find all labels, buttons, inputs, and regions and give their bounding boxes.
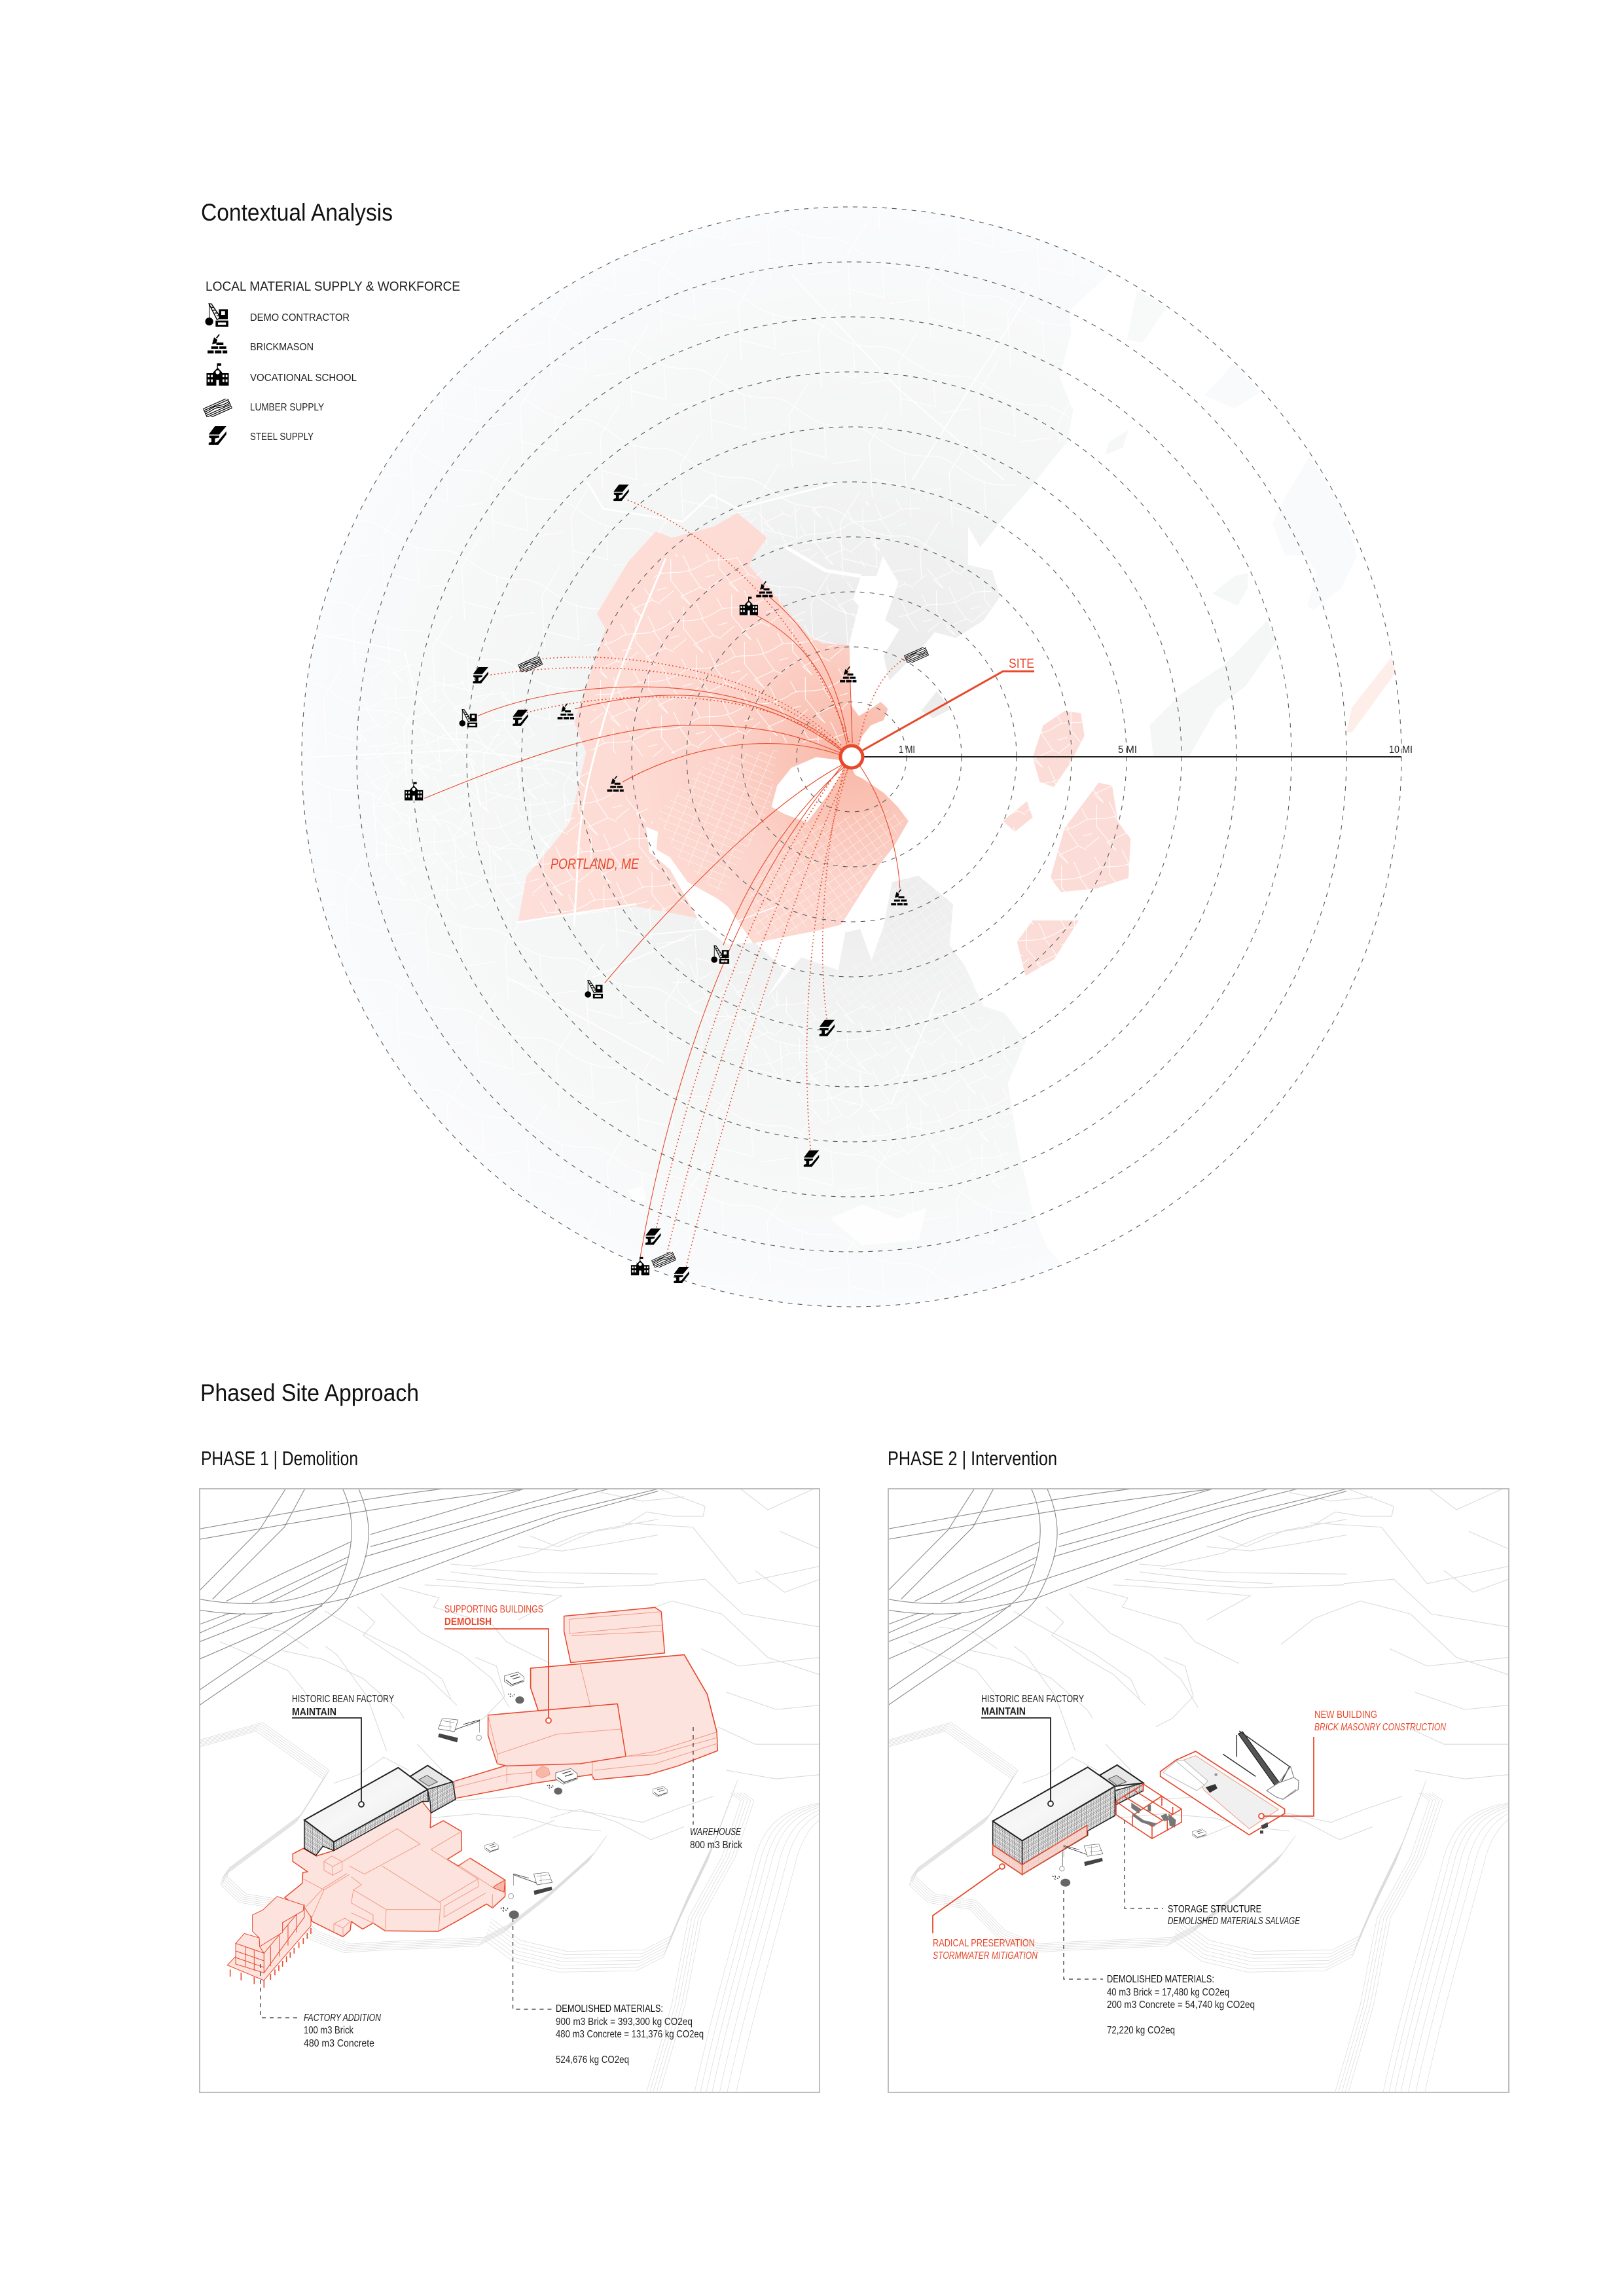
panel: phase 1 demolition	[194, 1489, 861, 2092]
callout: demolished materials phase 2: 72,220 kg CO2eq	[1107, 2025, 1175, 2036]
pink city of Portland area	[295, 274, 1396, 1105]
callout: new building	[1259, 1709, 1447, 1819]
callout: demolished materials phase 1	[513, 1918, 704, 2066]
legend: local material supply and workforce: LOCAL MATERIAL SUPPLY & WORKFORCE	[206, 280, 460, 294]
callout: demolished materials phase 2: 40 m3 Brick = 17,480 kg CO2eq	[1107, 1987, 1229, 1998]
callout: radical preservation: RADICAL PRESERVATION	[933, 1938, 1035, 1949]
legend: local material supply and workforce: LUMBER SUPPLY	[250, 402, 324, 413]
callout: storage structure: DEMOLISHED MATERIALS SALVAGE	[1168, 1916, 1300, 1927]
callout: factory addition: 100 m3 Brick	[304, 2025, 353, 2036]
callout: demolished materials phase 2: DEMOLISHED MATERIALS:	[1107, 1974, 1214, 1985]
distance labels: 1 MI	[899, 744, 915, 756]
distance labels: 10 MI	[1389, 744, 1413, 756]
callout: warehouse: WAREHOUSE	[690, 1827, 742, 1838]
callout: radical preservation	[933, 1864, 1038, 1961]
building: new brick masonry building	[1161, 1751, 1285, 1835]
site marker and leader	[840, 657, 1034, 768]
callout: historic bean factory maintain	[292, 1694, 394, 1807]
callout: storage structure	[1125, 1820, 1300, 1927]
callout: demolished materials phase 2	[1064, 1890, 1255, 2036]
callout: storage structure: STORAGE STRUCTURE	[1168, 1904, 1261, 1915]
callout: factory addition: 480 m3 Concrete	[304, 2038, 374, 2049]
callout: factory addition: FACTORY ADDITION	[304, 2013, 382, 2024]
distance axis	[863, 756, 1401, 757]
distance rings	[302, 207, 1401, 1307]
callout: demolished materials phase 1: 480 m3 Concrete = 131,376 kg CO2eq	[556, 2029, 704, 2040]
water: river inlet	[785, 547, 861, 576]
callout: supporting buildings demolish: DEMOLISH	[444, 1616, 492, 1628]
equipment: excavator, dozer, rubble	[1053, 1829, 1206, 1887]
callout: demolished materials phase 1: 524,676 kg CO2eq	[556, 2054, 629, 2066]
legend: local material supply and workforce: BRICKMASON	[250, 342, 314, 353]
callout: historic bean factory maintain	[981, 1694, 1084, 1806]
icon: demo contractor	[206, 304, 228, 327]
distance labels: 5 MI	[1118, 744, 1137, 756]
callout: new building: BRICK MASONRY CONSTRUCTION	[1314, 1722, 1447, 1733]
callout: warehouse	[690, 1727, 742, 1851]
legend: local material supply and workforce: DEMO CONTRACTOR	[250, 312, 350, 323]
water: Back Cove	[772, 757, 844, 822]
building: historic bean factory maintained	[304, 1766, 456, 1855]
building: factory addition on piles	[227, 1897, 311, 1988]
callout: historic bean factory maintain: HISTORIC BEAN FACTORY	[981, 1694, 1084, 1705]
icon: steel supply	[209, 426, 226, 445]
routes: solid workforce lines and dotted material lines	[405, 484, 929, 1283]
callout: historic bean factory maintain: MAINTAIN	[981, 1706, 1026, 1717]
callout: historic bean factory maintain: HISTORIC BEAN FACTORY	[292, 1694, 394, 1705]
callout: radical preservation: STORMWATER MITIGATION	[933, 1950, 1038, 1961]
callout: supporting buildings demolish: SUPPORTING BUILDINGS	[444, 1604, 543, 1615]
icon: lumber supply	[203, 398, 232, 419]
site base: roads and contours	[194, 1489, 861, 2092]
callout: demolished materials phase 1: DEMOLISHED MATERIALS:	[556, 2003, 663, 2014]
construction equipment and rubble	[438, 1672, 667, 1919]
panel frame	[200, 1489, 820, 2092]
callout: new building: NEW BUILDING	[1314, 1709, 1377, 1721]
icon: brickmason	[208, 335, 227, 354]
map icons: supply and workforce locations	[405, 484, 929, 1283]
callout: warehouse: 800 m3 Brick	[690, 1840, 742, 1851]
building: historic bean factory with radical preservation base	[993, 1765, 1144, 1874]
water: Fore River	[646, 827, 753, 943]
building: storage structure	[1116, 1784, 1182, 1838]
legend: local material supply and workforce: STEEL SUPPLY	[250, 431, 314, 443]
building: factory wings to demolish	[285, 1802, 505, 1937]
title: Contextual Analysis: Contextual Analysis	[201, 199, 393, 226]
legend: local material supply and workforce	[203, 280, 460, 445]
distance labels	[899, 744, 1413, 756]
callout: supporting buildings demolish	[444, 1604, 551, 1723]
callout: demolished materials phase 2: 200 m3 Concrete = 54,740 kg CO2eq	[1107, 1999, 1255, 2011]
building: warehouse and supporting buildings to demolish	[455, 1607, 717, 1798]
panel frame	[888, 1489, 1509, 2092]
legend: local material supply and workforce: VOCATIONAL SCHOOL	[250, 373, 357, 384]
site base: roads and contours	[882, 1489, 1550, 2092]
land base map	[414, 318, 1278, 1195]
callout: demolished materials phase 1: 900 m3 Brick = 393,300 kg CO2eq	[556, 2016, 693, 2028]
icon: vocational school	[207, 363, 229, 386]
site marker and leader: SITE	[1009, 657, 1034, 671]
label: Portland, ME: PORTLAND, ME	[550, 856, 639, 872]
callout: factory addition	[261, 1964, 382, 2049]
panel: phase 2 intervention	[882, 1489, 1550, 2092]
heading: Phased Site Approach: Phased Site Approach	[200, 1379, 419, 1406]
street grids	[749, 807, 905, 938]
heading: Phase 1: PHASE 1 | Demolition	[201, 1447, 358, 1470]
equipment: tower crane	[1223, 1731, 1299, 1799]
map: radial site context map of Portland, ME	[280, 182, 1413, 1346]
heading: Phase 2: PHASE 2 | Intervention	[888, 1447, 1057, 1470]
callout: historic bean factory maintain: MAINTAIN	[292, 1707, 336, 1718]
